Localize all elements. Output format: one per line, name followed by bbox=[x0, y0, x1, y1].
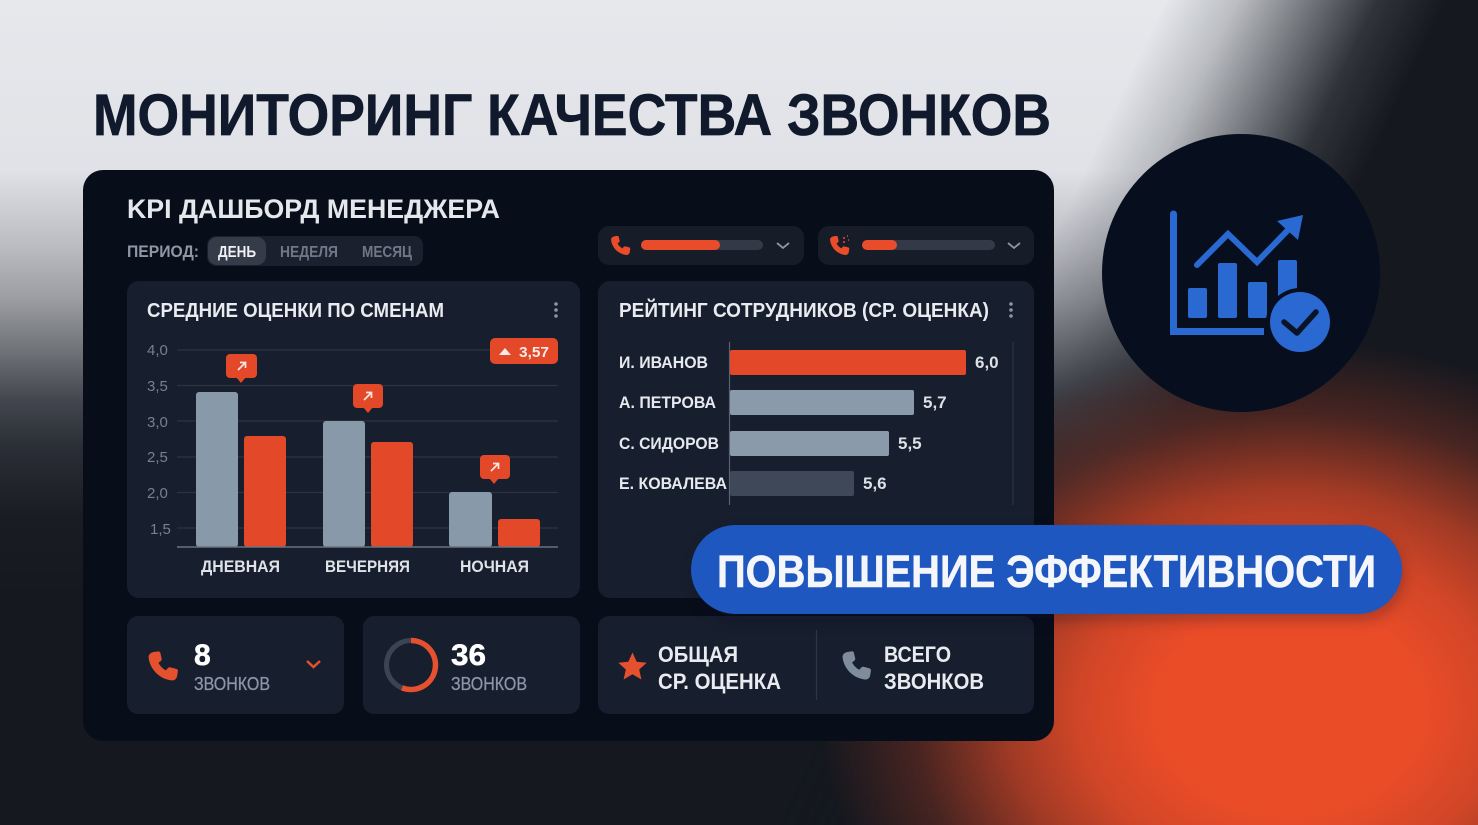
stat card: 8 calls: ЗВОНКОВ bbox=[194, 674, 270, 694]
chart heading: СРЕДНИЕ ОЦЕНКИ ПО СМЕНАМ bbox=[147, 300, 444, 322]
horizontal bar chart: С. СИДОРОВ bbox=[619, 434, 719, 453]
summary card bbox=[598, 616, 1034, 714]
bar chart bbox=[147, 338, 558, 576]
horizontal bar chart: 5,5 bbox=[898, 434, 922, 453]
icon: phone bbox=[843, 651, 871, 679]
stat card: 36 calls: 36 bbox=[451, 639, 486, 672]
bar chart: НОЧНАЯ bbox=[460, 557, 529, 576]
callout pill: ПОВЫШЕНИЕ ЭФФЕКТИВНОСТИ bbox=[717, 546, 1376, 597]
horizontal bar chart: 5,7 bbox=[923, 393, 947, 412]
stat card: 8 calls bbox=[127, 616, 344, 714]
bar chart: 3,5 bbox=[147, 378, 168, 395]
value badge: 3,57 bbox=[519, 344, 549, 361]
period selector bbox=[127, 236, 423, 266]
dashboard heading: KPI ДАШБОРД МЕНЕДЖЕРА bbox=[127, 194, 500, 224]
summary card: СР. ОЦЕНКА bbox=[658, 669, 781, 694]
trend badges bbox=[226, 354, 510, 484]
panel: employee rating bbox=[598, 281, 1034, 598]
summary card: ОБЩАЯ bbox=[658, 642, 738, 667]
period selector: ПЕРИОД: bbox=[127, 242, 199, 261]
bar chart: ВЕЧЕРНЯЯ bbox=[325, 557, 410, 576]
period selector: ДЕНЬ bbox=[218, 244, 256, 261]
bar chart: 1,5 bbox=[150, 521, 171, 538]
horizontal bar chart: А. ПЕТРОВА bbox=[619, 393, 716, 412]
horizontal bar chart: 6,0 bbox=[975, 353, 999, 372]
bar chart: 3,0 bbox=[147, 414, 168, 431]
filter: missed calls progress bbox=[818, 226, 1034, 265]
filter: calls progress bbox=[598, 226, 804, 265]
title: МОНИТОРИНГ КАЧЕСТВА ЗВОНКОВ bbox=[93, 83, 1051, 148]
horizontal bar chart bbox=[619, 342, 1013, 505]
icon: star bbox=[618, 652, 647, 680]
horizontal bar chart: И. ИВАНОВ bbox=[619, 353, 708, 372]
value badge bbox=[490, 338, 558, 364]
icon: analytics circle bbox=[1102, 134, 1380, 412]
summary card: ЗВОНКОВ bbox=[884, 669, 984, 694]
bar chart: 4,0 bbox=[147, 342, 168, 359]
rating heading: РЕЙТИНГ СОТРУДНИКОВ (СР. ОЦЕНКА) bbox=[619, 298, 989, 322]
bar chart: ДНЕВНАЯ bbox=[201, 557, 280, 576]
summary card: ВСЕГО bbox=[884, 642, 951, 667]
horizontal bar chart: Е. КОВАЛЕВА bbox=[619, 474, 727, 493]
stat card: 8 calls: 8 bbox=[194, 639, 211, 672]
stat card: 36 calls: ЗВОНКОВ bbox=[451, 674, 527, 694]
menu dots bbox=[554, 302, 558, 318]
callout pill bbox=[691, 525, 1402, 618]
bar chart: 2,0 bbox=[147, 485, 168, 502]
period selector: МЕСЯЦ bbox=[362, 244, 412, 261]
period selector: НЕДЕЛЯ bbox=[280, 244, 338, 261]
horizontal bar chart: 5,6 bbox=[863, 474, 887, 493]
menu dots bbox=[1009, 302, 1013, 318]
panel: average scores by shift bbox=[127, 281, 580, 598]
stat card: 36 calls bbox=[363, 616, 580, 714]
bar chart: 2,5 bbox=[147, 449, 168, 466]
dashboard panel bbox=[83, 170, 1054, 741]
